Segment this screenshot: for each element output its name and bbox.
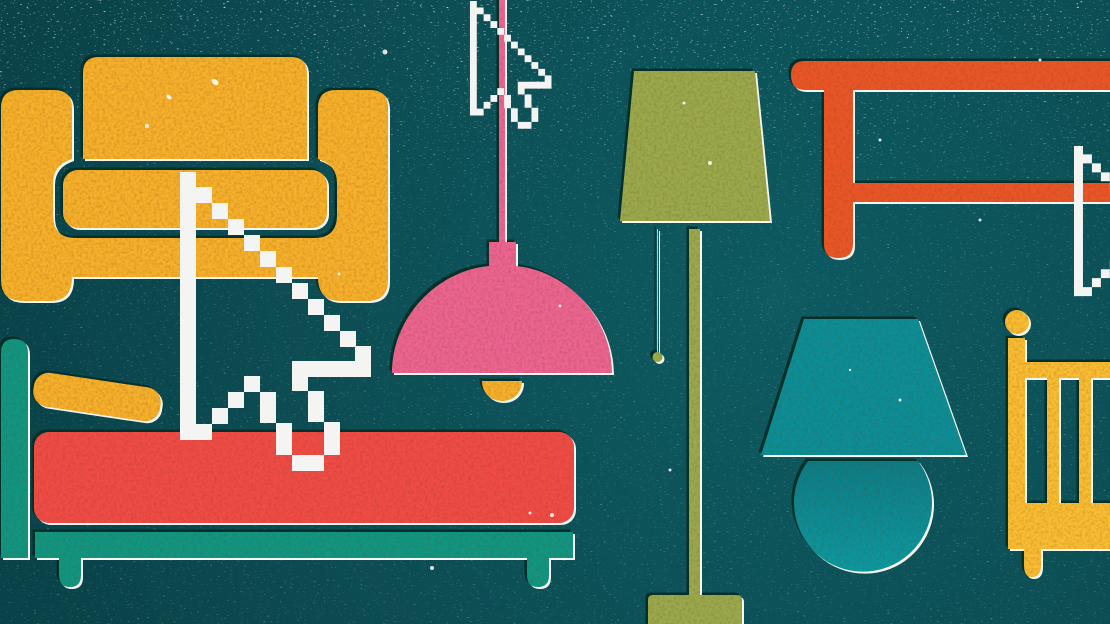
pendant lamp [392,0,612,401]
table lamp base [794,461,932,572]
floor lamp pole [689,229,700,597]
pendant bulb [482,381,522,401]
pendant cord [499,0,505,245]
coffee table [791,61,1110,258]
floor lamp [620,71,770,624]
armchair body and arms [1,90,388,301]
armchair [1,57,388,301]
table lamp shade [761,319,966,455]
bed frame and legs [35,532,573,587]
crib frame and slats [1008,338,1110,577]
bed pillow [31,371,163,423]
paper flecks on shapes [145,50,1042,570]
crib [1005,310,1110,577]
floor lamp pull chain [652,229,662,362]
right pixel cursor cut off by edge [1074,146,1110,313]
table lamp [761,319,966,572]
bed [1,339,574,587]
large pixel cursor [180,172,371,471]
floor lamp base [648,595,742,624]
armchair seat cushion [63,170,327,228]
crib finial [1005,310,1029,334]
pendant dome shade [392,242,612,373]
bed headboard [1,339,28,558]
armchair back [83,57,307,159]
small pixel cursor on pendant cord [470,1,552,129]
floor lamp shade [620,71,770,221]
bed mattress [34,432,574,523]
